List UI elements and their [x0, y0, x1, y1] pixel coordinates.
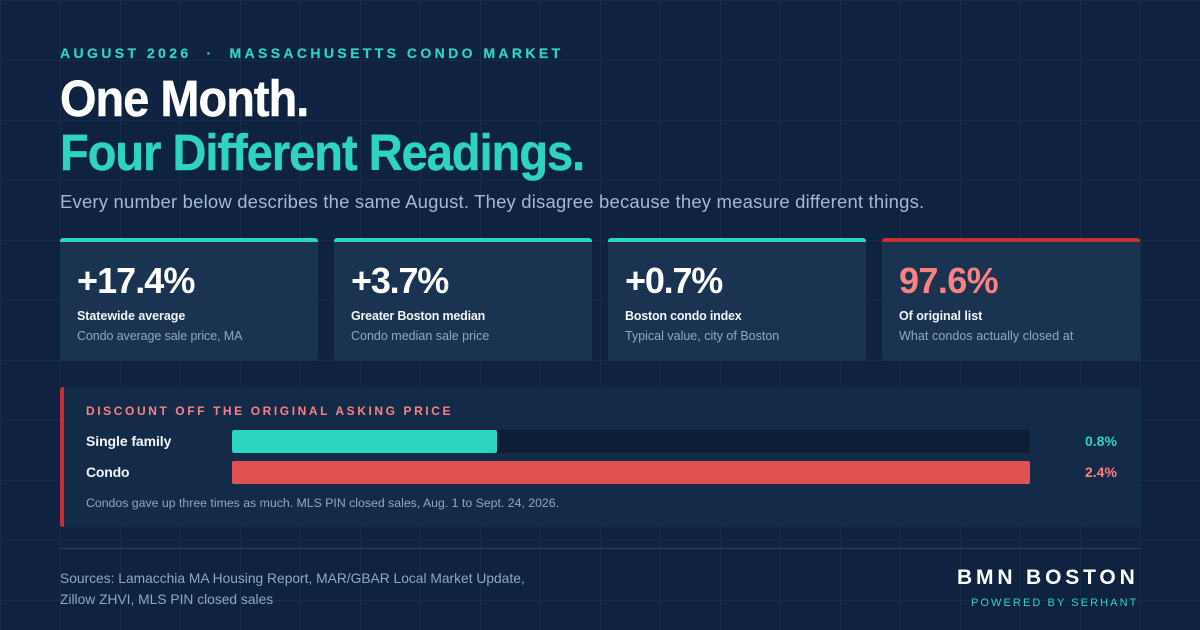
row label: condo: Condo — [86, 464, 129, 480]
brand: BMN BOSTON — [957, 566, 1139, 589]
panel: of original list — [882, 238, 1140, 361]
bar: condo — [232, 461, 1030, 484]
panel: of original list: 97.6% — [899, 260, 998, 301]
panel: greater boston median: +3.7% — [351, 260, 448, 301]
bar track: single family — [232, 430, 1030, 453]
panel: statewide average: Condo average sale price, MA — [77, 329, 242, 343]
value: condo: 2.4% — [1085, 464, 1117, 480]
panel: greater boston median — [334, 238, 592, 361]
eyebrow: AUGUST 2026 · MASSACHUSETTS CONDO MARKET — [60, 45, 564, 61]
row label: single family: Single family — [86, 433, 171, 449]
title: Four Different Readings. — [60, 124, 584, 181]
powered by: POWERED BY SERHANT — [971, 597, 1138, 609]
panel: boston condo index: Typical value, city of Boston — [625, 329, 779, 343]
sources — [60, 571, 525, 607]
panel: statewide average: +17.4% — [77, 260, 194, 301]
discount heading: DISCOUNT OFF THE ORIGINAL ASKING PRICE — [86, 404, 453, 418]
panel: of original list: Of original list — [899, 309, 982, 323]
panel: statewide average: Statewide average — [77, 309, 185, 323]
panel: greater boston median: Condo median sale price — [351, 329, 489, 343]
panel: discount off the original asking price — [60, 387, 1140, 527]
panel: greater boston median: Greater Boston median — [351, 309, 485, 323]
sources: Sources: Lamacchia MA Housing Report, MAR/GBAR Local Market Update, — [60, 571, 525, 586]
panel: boston condo index — [608, 238, 866, 361]
title: One Month. — [60, 70, 308, 127]
panel: statewide average — [60, 238, 318, 361]
subtitle: Every number below describes the same August. They disagree because they measure different things. — [60, 191, 924, 212]
panel: boston condo index: +0.7% — [625, 260, 722, 301]
panel: boston condo index: Boston condo index — [625, 309, 742, 323]
value: single family: 0.8% — [1085, 433, 1117, 449]
title — [60, 70, 584, 181]
sources: Zillow ZHVI, MLS PIN closed sales — [60, 592, 273, 607]
panel: of original list: What condos actually closed at — [899, 329, 1073, 343]
footer divider — [60, 548, 1140, 549]
discount note: Condos gave up three times as much. MLS PIN closed sales, Aug. 1 to Sept. 24, 2026. — [86, 496, 559, 510]
